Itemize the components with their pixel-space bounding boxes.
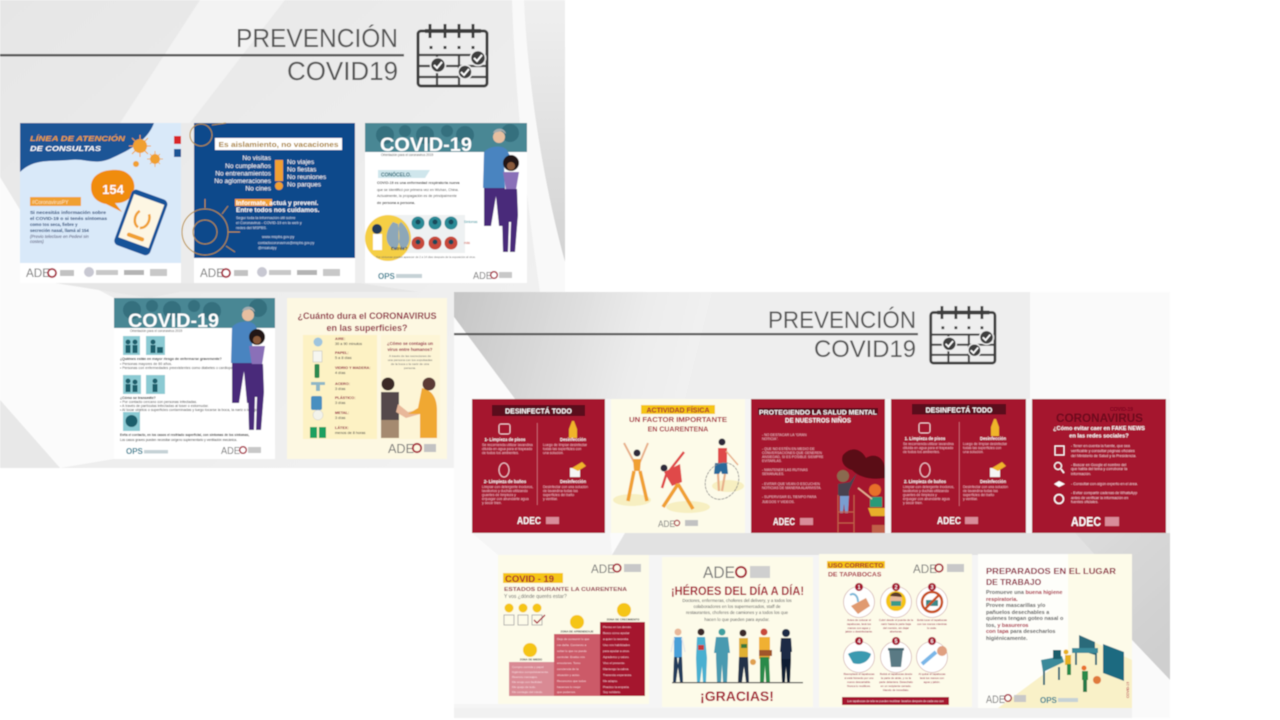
panel: left slide [0, 0, 565, 468]
panel: cuánto dura el coronavirus: en las superficies? [326, 323, 408, 333]
panel: desinfectá todo (2): Desinfectar con una solución [963, 485, 1008, 489]
panel: covid-19 transmisión: • Por contacto cercano con personas infectadas. [120, 400, 197, 404]
panel: covid-19 transmisión: COVID-19 [128, 310, 219, 332]
panel: desinfectá todo (2): de lavandina todas las [963, 489, 998, 493]
panel: fake news: información. [1071, 472, 1091, 476]
panel: línea de atención: ADE [26, 266, 50, 280]
panel: actividad física [611, 399, 745, 533]
panel: desinfectá todo (2): Se recomienda utilizar lavandina [903, 442, 954, 446]
panel: preparados en el lugar de trabajo [978, 554, 1132, 708]
panel: uso correcto de tapabocas [819, 554, 972, 707]
panel: línea de atención: #CoronavirusPY [32, 200, 69, 206]
panel: salud mental de nuestros niños: ANSIEDAD, SI ES POSIBLE SIEMPRE [762, 455, 824, 459]
panel: cuánto dura el coronavirus: VIDRIO Y MADERA: [335, 366, 371, 370]
panel: héroes del día a día: ¡GRACIAS! [700, 688, 774, 704]
panel: es aislamiento: No fiestas [287, 166, 317, 174]
panel: uso correcto de tapabocas: jabón o desinfectante. [844, 630, 873, 634]
panel: estados durante la cuarentena [498, 555, 649, 704]
panel: uso correcto de tapabocas: tapabocas, lavá tus [847, 622, 872, 626]
panel: uso correcto de tapabocas: Nunca lo reutilices. [847, 684, 871, 688]
panel: desinfectá todo (1): Luego de limpiar desinfectar [543, 443, 588, 447]
panel: línea de atención: costes) [30, 239, 44, 244]
panel: cuánto dura el coronavirus: 3 días [335, 401, 345, 405]
panel: uso correcto de tapabocas: 5 [895, 639, 898, 645]
panel: es aislamiento: redes del MSPBS. [236, 226, 267, 230]
panel: desinfectá todo (2): Limpiar con detergente inodoros, [903, 485, 954, 489]
panel: preparados en el lugar de trabajo: pañuelos desechables a [986, 610, 1050, 616]
panel: salud mental de nuestros niños: SEMANALES. [762, 472, 784, 476]
panel: estados durante la cuarentena: Pienso en los demás. [603, 625, 632, 629]
panel: preparados en el lugar de trabajo: PREPARADOS EN EL LUGAR [986, 566, 1116, 576]
panel: estados durante la cuarentena: controlar. Evalúo mis [557, 655, 585, 659]
panel: cuánto dura el coronavirus: AIRE: [335, 337, 345, 341]
panel: desinfectá todo (1): y ventilar. [543, 497, 558, 501]
panel: estados durante la cuarentena: Me quejo de todo. [512, 685, 536, 689]
panel: estados durante la cuarentena: Dejo de consumir lo que [557, 637, 590, 641]
panel: estados durante la cuarentena: para ayudar a otros. [603, 649, 630, 653]
panel: covid-19 transmisión: • A través de partículas infectadas al toser o estornudar. [120, 404, 209, 408]
panel: héroes del día a día: ADE [703, 563, 735, 582]
panel: desinfectá todo (1): Se recomienda utilizar lavandina [482, 443, 533, 447]
heading: left slide title: PREVENCIÓN [236, 23, 398, 53]
panel: línea de atención [20, 123, 181, 283]
panel: uso correcto de tapabocas: agua y jabón. [924, 680, 941, 684]
panel: desinfectá todo (1): todas las superficies con [543, 447, 581, 451]
panel: estados durante la cuarentena: ZONA DE CRECIMIENTO [607, 618, 640, 622]
panel: desinfectá todo (2): Luego de limpiar desinfectar [963, 442, 1008, 446]
panel: estados durante la cuarentena: Vivo el presente. [603, 661, 625, 665]
figure: six workers [671, 628, 803, 683]
panel: cuánto dura el coronavirus: 4 días [335, 371, 345, 375]
panel: uso correcto de tapabocas: en un recipiente cerrado. [881, 684, 912, 688]
panel: uso correcto de tapabocas: ADE [913, 562, 937, 576]
panel: desinfectá todo (2): y secar bien. [903, 501, 923, 505]
icon: virus cluster [129, 135, 163, 167]
panel: desinfectá todo (1): Desinfección [560, 479, 586, 484]
panel: fake news: ¿Cómo evitar caer en FAKE NEWS [1053, 426, 1145, 432]
panel: desinfectá todo (2): 1. Limpieza de pisos [905, 436, 946, 441]
panel: héroes del día a día: restaurantes, choferes de camiones y a todos los que [686, 610, 789, 615]
panel: covid-19 conócelo: más [464, 241, 470, 245]
panel: cuánto dura el coronavirus: 3 días [335, 387, 345, 391]
panel: covid-19 transmisión: • Al tocar objetos o superficies contaminadas y luego tocarse la boca, la nariz o los ojos. [120, 408, 260, 412]
panel: desinfectá todo (1): 1- Limpieza de pisos [485, 437, 526, 442]
panel: fake news: - Tener en cuenta la fuente, que sea [1071, 444, 1131, 448]
panel: estados durante la cuarentena: higiénico compulsivamente. [512, 670, 549, 674]
panel: estados durante la cuarentena: Reconozco que todos [557, 679, 587, 683]
panel: cuánto dura el coronavirus: 30 a 90 minutos [335, 342, 362, 346]
panel: es aislamiento: el Coronavirus - COVID-19 en la web y [236, 221, 302, 225]
panel: salud mental de nuestros niños: NOTICIA". [762, 437, 778, 441]
panel: estados durante la cuarentena: conciencia de la [557, 667, 579, 671]
panel: salud mental de nuestros niños: JUEGOS Y VIDEOS. [762, 500, 795, 504]
panel: es aislamiento: No cumpleaños [225, 163, 272, 170]
panel: es aislamiento: @msaludpy [258, 246, 277, 250]
panel: desinfectá todo (1): guantes de limpieza y [482, 493, 516, 497]
panel: línea de atención: LÍNEA DE ATENCIÓN [30, 134, 126, 143]
panel: desinfectá todo (2): superficies del baño [963, 493, 994, 497]
panel: uso correcto de tapabocas: parte delantera. Desechalo [879, 680, 913, 684]
panel: estados durante la cuarentena: me daña. Comienzo a [557, 643, 587, 647]
panel: preparados en el lugar de trabajo: respiratoria. [986, 597, 1018, 603]
panel: estados durante la cuarentena: ZONA DE APRENDIZAJE [561, 630, 594, 634]
panel: desinfectá todo (2): ADEC [937, 515, 961, 527]
panel: fake news: - Consultar con algún experto en el área. [1071, 482, 1138, 486]
panel: salud mental de nuestros niños: PROTEGIENDO LA SALUD MENTAL [759, 410, 877, 416]
panel: uso correcto de tapabocas: USO CORRECTO [828, 562, 883, 570]
panel: desinfectá todo (2): Desinfección [980, 436, 1006, 441]
panel: covid-19 transmisión: ¿Cómo se transmite? [120, 396, 156, 400]
panel: cuánto dura el coronavirus: menos de 8 horas [335, 431, 365, 435]
panel: covid-19 conócelo: COVID-19 [380, 134, 472, 156]
panel: es aislamiento: Informate, actuá y prevení. [236, 200, 319, 207]
panel: covid-19 conócelo: que se identificó por primera vez en Wuhan, China. [377, 188, 459, 192]
panel: cuánto dura el coronavirus: PLÁSTICO: [335, 395, 355, 400]
panel: héroes del día a día: Doctores, enfermeras, choferes del delivery, y a todos los [682, 598, 792, 603]
panel: estados durante la cuarentena: Busco cómo ayudar [603, 631, 630, 635]
panel: desinfectá todo (1): DESINFECTÁ TODO [505, 406, 572, 416]
panel: uso correcto de tapabocas: Retirá el tapabocas desde [880, 672, 913, 676]
panel: uso correcto de tapabocas: 4 [858, 639, 861, 645]
panel: es aislamiento: No aglomeraciones [214, 178, 272, 185]
panel: es aislamiento: No viajes [287, 159, 315, 166]
panel: desinfectá todo (2): diluida en agua para el trapeado [903, 446, 953, 450]
panel: covid-19 conócelo: Tus síntomas pueden aparecer de 2 a 14 días después de la exposición al virus. [376, 255, 476, 259]
panel: cuánto dura el coronavirus: una persona con tos expulsadas [388, 358, 433, 362]
panel: estados durante la cuarentena: hacemos lo mejor [557, 685, 581, 689]
panel: estados durante la cuarentena: emociones. Tomo [557, 661, 581, 665]
panel: salud mental de nuestros niños: - SUPERVISAR EL TIEMPO PARA [762, 495, 817, 499]
panel: es aislamiento: Seguí toda la información útil sobre [236, 216, 296, 220]
panel: preparados en el lugar de trabajo: COVID-19 [1126, 682, 1130, 698]
panel: uso correcto de tapabocas: 1 [858, 585, 861, 591]
panel: covid-19 transmisión: OPS [126, 447, 144, 456]
panel: salud mental de nuestros niños: ADEC [773, 516, 795, 528]
panel: uso correcto de tapabocas: manos con agua y [848, 626, 871, 630]
panel: línea de atención: el COVID-19 o si tenés síntomas [30, 216, 108, 221]
panel: estados durante la cuarentena: a quien lo necesita. [603, 637, 629, 641]
panel: uso correcto de tapabocas: DE TAPABOCAS [828, 572, 882, 578]
panel: es aislamiento: Entre todos nos cuidamos. [236, 207, 320, 214]
panel: cuánto dura el coronavirus: ¿Cómo se contagia un [387, 341, 433, 346]
heading: right slide title: COVID19 [814, 336, 916, 363]
panel: desinfectá todo (1): Limpiar con detergente inodoros, [482, 485, 533, 489]
panel: desinfectá todo (2): una solución. [963, 450, 984, 454]
panel: covid-19 conócelo: OPS [378, 272, 396, 281]
panel: covid-19 conócelo: COVID-19 es una enfermedad respiratoria nueva [377, 181, 460, 185]
panel: héroes del día a día: ¡HÉROES DEL DÍA A DÍA! [671, 585, 804, 598]
panel: covid-19 transmisión: ¿Quiénes están en mayor riesgo de enfermarse gravemente? [120, 357, 222, 361]
panel: desinfectá todo (1): diluida en agua para el trapeado [482, 447, 532, 451]
panel: uso correcto de tapabocas: Antes de colocar el [847, 618, 871, 622]
panel: covid-19 conócelo: ADE [473, 271, 492, 282]
panel: desinfectá todo (1): enjuagar con abundante agua [482, 497, 529, 501]
panel: cuánto dura el coronavirus: virus entre humanos? [388, 347, 433, 352]
panel: fake news: del Ministerio de Salud y la Presidencia. [1071, 454, 1136, 458]
illustration: office desks [1041, 635, 1124, 692]
panel: desinfectá todo (1): una solución. [543, 451, 564, 455]
panel: es aislamiento: Es aislamiento, no vacaciones [218, 140, 338, 149]
panel: salud mental de nuestros niños: - MANTENER LAS RUTINAS [762, 468, 808, 472]
panel: cuánto dura el coronavirus: ¿Cuánto dura el CORONAVIRUS [298, 311, 436, 321]
panel: cuánto dura el coronavirus: METAL: [335, 411, 349, 415]
panel: es aislamiento: ADE [200, 266, 224, 280]
panel: fake news: fuentes oficiales. [1071, 500, 1098, 504]
heading: right slide title [454, 307, 918, 363]
figure: children painting [837, 470, 885, 533]
panel: cuánto dura el coronavirus: persona. [404, 366, 416, 370]
panel: estados durante la cuarentena: Soy solidario. [603, 690, 621, 694]
panel: desinfectá todo (1): lavatorios y duchas utilizando [482, 489, 528, 493]
panel: uso correcto de tapabocas: lavá tus manos con [920, 676, 944, 680]
panel: cuánto dura el coronavirus: A través de las secreciones de [389, 354, 431, 358]
panel: right slide [454, 292, 1170, 720]
panel: es aislamiento: No parques [287, 182, 322, 188]
panel: es aislamiento: www.mspbs.gov.py [262, 235, 294, 239]
heading: left slide title [0, 23, 404, 86]
figure: couple [231, 307, 265, 430]
panel: estados durante la cuarentena: ADE [591, 562, 615, 576]
heading: right slide title: PREVENCIÓN [768, 307, 916, 334]
panel: actividad física: UN FACTOR IMPORTANTE [629, 417, 727, 424]
panel: preparados en el lugar de trabajo: OPS [1040, 696, 1058, 705]
panel: estados durante la cuarentena: ESTADOS DURANTE LA CUARENTENA [504, 587, 628, 593]
panel: uso correcto de tapabocas: Los tapabocas de tela se pueden reutilizar: lavarlos después de cada uso con [847, 699, 944, 703]
icon: calendar with checks [931, 306, 995, 363]
panel: estados durante la cuarentena: Me adapto. [603, 679, 618, 683]
panel: desinfectá todo (1): de todos los ambientes. [482, 451, 519, 455]
panel: línea de atención: secreción nasal, llamá al 154 [30, 228, 89, 233]
panel: uso correcto de tapabocas: si está húmedo por uno [844, 676, 874, 680]
panel: es aislamiento: contactocoronavirus@mspbs.gov.py [258, 241, 314, 245]
panel: salud mental de nuestros niños: - QUE NO ESTÉN EN MEDIO DE [762, 446, 815, 451]
panel: preparados en el lugar de trabajo: tos, y basureros [986, 623, 1028, 629]
panel: uso correcto de tapabocas: Al quitar el tapabocas [919, 672, 946, 676]
panel: fake news: CORONAVIRUS [1056, 411, 1143, 425]
panel: salud mental de nuestros niños: DE NUESTROS NIÑOS [785, 418, 851, 424]
panel: desinfectá todo (2): de todos los ambientes. [903, 450, 940, 454]
panel: línea de atención: DE CONSULTAS [30, 144, 101, 153]
panel: estados durante la cuarentena: Reenvío mensajes. [512, 675, 538, 679]
panel: covid-19 conócelo: Estrés? [391, 246, 408, 251]
panel: es aislamiento: No cines [245, 186, 272, 192]
panel: es aislamiento [182, 123, 355, 283]
panel: cuánto dura el coronavirus: 5 a 8 días [335, 356, 352, 360]
heading: left slide title: COVID19 [287, 56, 398, 86]
panel: fake news: COVID-19 [1110, 407, 1133, 413]
panel: línea de atención: Si necesitás información sobre [30, 210, 107, 215]
panel: fake news: - Buscar en Google el nombre del [1071, 463, 1126, 467]
panel: salud mental de nuestros niños: NOTICIAS DE MANERA ALARMISTA. [762, 486, 821, 490]
panel: desinfectá todo (1): de lavandina todas las [543, 489, 578, 493]
panel: cuánto dura el coronavirus: ACERO: [335, 382, 350, 386]
panel: línea de atención: (Previo teleclave en Pedevi sin [30, 234, 89, 239]
panel: desinfectá todo (1) [472, 399, 605, 533]
panel: covid-19 conócelo: Síntomas [464, 220, 478, 224]
panel: desinfectá todo (2): 2. Limpieza de baños [904, 479, 947, 484]
panel: estados durante la cuarentena: Practico la empatía. [603, 685, 630, 689]
panel: actividad física: ADE [658, 519, 675, 529]
panel: preparados en el lugar de trabajo: con tapa para desecharlos [986, 629, 1055, 635]
figure: handshake [381, 378, 437, 438]
panel: cuánto dura el coronavirus: ADE [388, 441, 414, 456]
panel: fake news: ADEC [1071, 514, 1101, 529]
panel: cuánto dura el coronavirus [287, 298, 447, 459]
panel: uso correcto de tapabocas: 2 [895, 585, 898, 591]
panel: estados durante la cuarentena: ZONA DE MIEDO [520, 658, 543, 662]
panel: uso correcto de tapabocas: la parte de atrás, y no la [881, 676, 911, 680]
panel: héroes del día a día [662, 557, 813, 707]
panel: línea de atención: como tos seca, fiebre y [30, 222, 78, 227]
panel: fake news: verificable y consultar páginas oficiales [1071, 449, 1135, 453]
panel: desinfectá todo (2): guantes de limpieza y [903, 493, 937, 497]
panel: héroes del día a día: hacen lo que pueden para ayudar. [704, 617, 770, 622]
panel: desinfectá todo (1): y secar bien. [482, 501, 502, 505]
panel: preparados en el lugar de trabajo: ADE [986, 694, 1005, 706]
panel: estados durante la cuarentena: soltar lo que no puedo [557, 649, 587, 653]
panel: uso correcto de tapabocas: nuevo descartable. [847, 680, 871, 684]
panel: uso correcto de tapabocas: nariz hasta la parte baja [881, 622, 911, 626]
panel: salud mental de nuestros niños: CONVERSACIONES QUE GENEREN [762, 451, 822, 455]
panel: desinfectá todo (2): Desinfección [980, 479, 1006, 484]
panel: covid-19 transmisión [114, 298, 275, 459]
figure: couple [483, 129, 519, 252]
panel: estados durante la cuarentena: que podemos. [557, 690, 576, 694]
panel: desinfectá todo (2): y ventilar. [963, 497, 978, 501]
panel: actividad física: ACTIVIDAD FÍSICA [646, 406, 710, 414]
panel: preparados en el lugar de trabajo: quienes tengan goteo nasal o [986, 616, 1064, 622]
panel: salud mental de nuestros niños: - NO DESTACAR LA "GRAN [762, 433, 807, 437]
panel: covid-19 conócelo: de persona a persona. [377, 201, 415, 205]
panel: estados durante la cuarentena: Me enojo con facilidad. [512, 680, 543, 684]
panel: uso correcto de tapabocas: Hacelo de inmediato. [883, 688, 909, 692]
panel: línea de atención: 154 [102, 182, 125, 197]
panel: covid-19 conócelo: CONÓCELO. [381, 170, 412, 178]
panel: estados durante la cuarentena: Transmito esperanza. [603, 673, 632, 677]
panel: desinfectá todo (2): DESINFECTÁ TODO [926, 406, 993, 414]
panel: preparados en el lugar de trabajo: higiénicamente. [986, 636, 1028, 642]
panel: fake news: antes de verificar la información en [1071, 496, 1128, 500]
panel: estados durante la cuarentena: COVID - 19 [505, 574, 554, 585]
panel: cuánto dura el coronavirus: PAPEL: [335, 351, 349, 355]
panel: es aislamiento: No reuniones [287, 174, 327, 181]
panel: uso correcto de tapabocas: 3 [931, 585, 934, 591]
panel: estados durante la cuarentena: situación y actúo. [557, 673, 580, 677]
panel: fake news: - Evitar compartir cadenas de WhatsApp [1071, 491, 1137, 495]
panel: fake news: que habla del tema y corroborar la [1071, 467, 1128, 471]
panel: desinfectá todo (1): ADEC [517, 515, 541, 527]
panel: desinfectá todo (2): todas las superficies con [963, 446, 1001, 450]
panel: covid-19 transmisión: ADE [221, 446, 240, 457]
panel: preparados en el lugar de trabajo: Promueve una buena higiene [986, 590, 1062, 596]
panel: desinfectá todo (2) [891, 399, 1026, 533]
panel: uso correcto de tapabocas: 6 [931, 639, 934, 645]
panel: uso correcto de tapabocas: aberturas. [890, 630, 903, 634]
panel: fake news [1032, 399, 1166, 533]
panel: héroes del día a día: colaboradores en los supermercados, staff de [693, 604, 781, 609]
panel: salud mental de nuestros niños: EVITARLAS. [762, 459, 782, 463]
panel: estados durante la cuarentena: Agradezco y valoro. [603, 655, 630, 659]
panel: salud mental de nuestros niños: - EVITAR QUE VEAN O ESCUCHEN [762, 482, 820, 486]
panel: uso correcto de tapabocas: Reemplazá el tapabocas [844, 672, 875, 676]
panel: uso correcto de tapabocas: Cubrí desde el puente de la [879, 618, 914, 622]
panel: estados durante la cuarentena: Me contagio del miedo. [512, 690, 543, 694]
icon: calendar with checks [418, 24, 487, 86]
panel: covid-19 conócelo: Orientación para el coronavirus 2019 [381, 153, 433, 157]
panel: preparados en el lugar de trabajo: DE TRABAJO [986, 577, 1042, 587]
panel: preparados en el lugar de trabajo: Provee mascarillas y/o [986, 603, 1046, 609]
panel: uso correcto de tapabocas: lo usás. [927, 626, 937, 630]
panel: covid-19 transmisión: Orientación para el coronavirus 2019 [130, 329, 182, 333]
panel: cuánto dura el coronavirus: de la boca o la nariz de otra [391, 362, 429, 366]
panel: es aislamiento: No visitas [242, 155, 272, 162]
panel: es aislamiento: No entrenamientos [215, 170, 272, 178]
panel: cuánto dura el coronavirus: 3 días [335, 416, 345, 420]
panel: desinfectá todo (2): lavatorios y duchas utilizando [903, 489, 949, 493]
panel: covid-19 conócelo: Actualmente, la propagación es de principalmente [377, 194, 457, 198]
panel: desinfectá todo (1): Desinfectar con una solución [543, 485, 588, 489]
panel: desinfectá todo (1): superficies del baño [543, 493, 574, 497]
panel: uso correcto de tapabocas: con tus manos mientras [917, 622, 947, 626]
figure: exercising people [624, 438, 745, 509]
panel: estados durante la cuarentena: Y vos ¿dónde querés estar? [504, 594, 567, 600]
panel: fake news: en las redes sociales? [1069, 434, 1129, 440]
panel: estados durante la cuarentena: Compro comida y papel [512, 665, 544, 669]
panel: cuánto dura el coronavirus: LÁTEX: [335, 425, 349, 430]
panel: estados durante la cuarentena: Uso mis habilidades [603, 643, 630, 647]
panel: uso correcto de tapabocas: Evitá tocar el tapabocas [917, 618, 948, 622]
panel: desinfectá todo (2): enjuagar con abundante agua [903, 497, 950, 501]
panel: desinfectá todo (1): Desinfección [560, 437, 586, 442]
panel: desinfectá todo (1): 2- Limpieza de baños [484, 479, 527, 484]
panel: covid-19 transmisión: Evita el contacto, en los casos el resfriado superficial, con síntomas de los síntomas, [120, 433, 249, 437]
panel: actividad física: EN CUARENTENA [648, 426, 708, 434]
panel: covid-19 transmisión: • Personas con enfermedades preexistentes como diabetes o cardiopatías. [120, 366, 240, 370]
panel: covid-19 transmisión: Los casos graves pueden necesitar oxígeno suplementario y ventilación mecánica. [120, 438, 237, 442]
panel: covid-19 conócelo [365, 123, 527, 283]
panel: salud mental de nuestros niños [751, 399, 885, 533]
panel: covid-19 transmisión: • Personas mayores de 60 años. [120, 362, 172, 366]
panel: uso correcto de tapabocas: del mentón, sin dejar [883, 626, 909, 630]
panel: estados durante la cuarentena: Mantengo la calma. [603, 667, 629, 671]
